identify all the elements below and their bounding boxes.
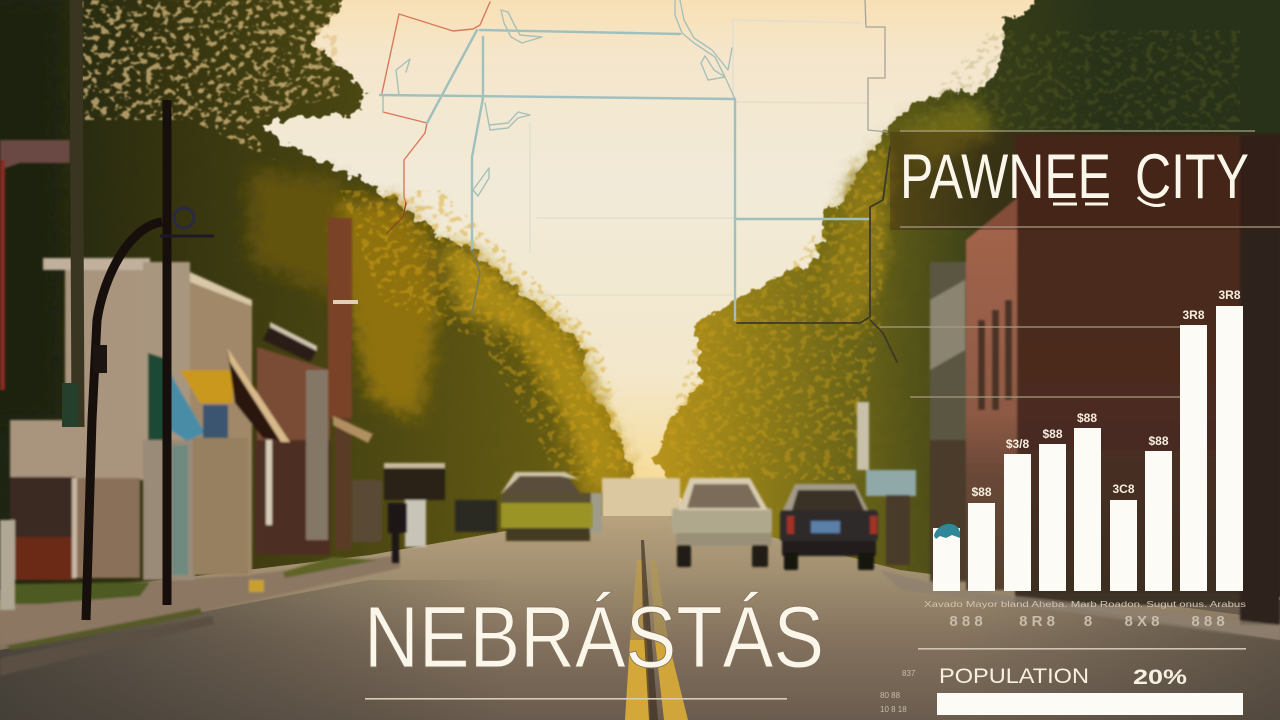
road centre lines xyxy=(630,560,646,640)
right trees xyxy=(655,0,1280,600)
label: POPULATION xyxy=(939,664,1089,688)
dappled light in right canopy xyxy=(665,140,890,480)
left pavement and verges xyxy=(0,555,400,676)
underline xyxy=(365,698,787,700)
bar category labels: Xavado Mayor bland Aheba. Marb Roadon. Sugut onus. Arabus xyxy=(924,599,1246,609)
bar value labels: $88 xyxy=(971,485,992,499)
header rules xyxy=(880,131,1280,397)
bar value labels: $88 xyxy=(1148,434,1169,448)
bar chart: 8 X 8 xyxy=(1124,613,1160,630)
far horizon xyxy=(602,478,680,520)
side ticks: 80 88 xyxy=(880,691,901,700)
bar chart: 8 xyxy=(1084,613,1092,630)
bars xyxy=(933,306,1243,591)
heading text: NEBRÁSTÁS xyxy=(364,589,824,686)
faint county grid xyxy=(530,20,868,295)
bar chart: 8 R 8 xyxy=(1019,613,1055,630)
population stat xyxy=(880,648,1246,715)
bar value labels: $3/8 xyxy=(1006,437,1030,451)
bar value labels: $88 xyxy=(1077,411,1097,425)
poles and street lamps xyxy=(70,0,358,620)
divider xyxy=(918,648,1246,650)
side ticks: 837 xyxy=(902,669,916,678)
parked vehicles xyxy=(455,402,916,570)
map outline: state and county lines xyxy=(380,0,897,362)
side ticks xyxy=(880,669,916,714)
left buildings xyxy=(0,140,445,610)
bar chart: 8 8 8 xyxy=(1191,613,1225,630)
bar chart xyxy=(924,288,1246,630)
value: 20% xyxy=(1133,665,1187,689)
heading: PAWNEE xyxy=(900,142,1111,212)
right brick building xyxy=(880,135,1280,640)
icon: teal blob on first bar xyxy=(934,524,960,539)
heading: CITY xyxy=(1135,142,1249,212)
left trees xyxy=(0,0,635,600)
bar chart: 8 8 8 xyxy=(949,613,983,630)
red boundary xyxy=(382,2,490,203)
state east border xyxy=(865,0,887,132)
bar value labels xyxy=(971,288,1241,499)
title band tint xyxy=(890,132,1280,230)
bar value labels: $88 xyxy=(1042,427,1063,441)
bar value labels: 3R8 xyxy=(1182,308,1205,322)
population bar xyxy=(937,693,1243,715)
blue-grey roads xyxy=(380,30,870,320)
dappled light in left canopy xyxy=(70,0,340,160)
side ticks: 10 8 18 xyxy=(880,705,907,714)
road xyxy=(0,516,1280,720)
title block: Pawnee City xyxy=(880,131,1280,397)
bar value labels: 3C8 xyxy=(1112,482,1135,496)
heading flourishes xyxy=(1053,197,1165,206)
rivers xyxy=(396,0,735,196)
bar value labels: 3R8 xyxy=(1218,288,1241,302)
